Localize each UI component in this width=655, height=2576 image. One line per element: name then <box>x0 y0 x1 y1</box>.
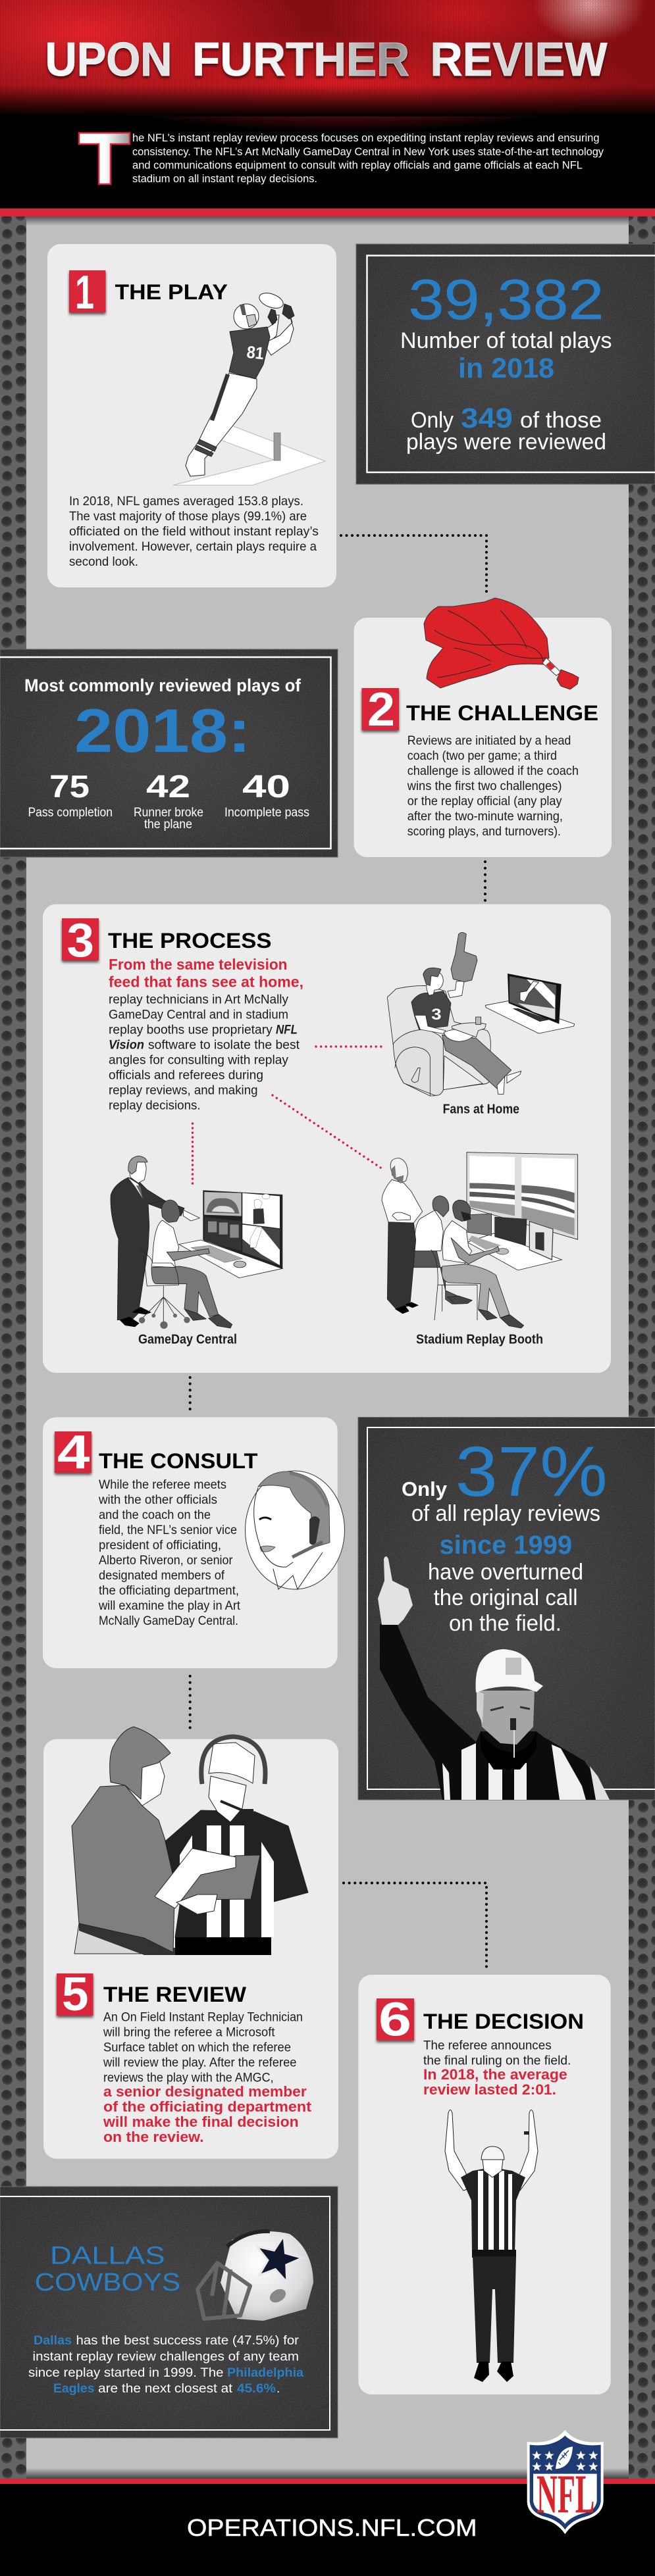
panel: step 6 the decision <box>358 1975 611 2394</box>
text: only 349 reviewed <box>406 403 606 455</box>
bottom red bar <box>0 2479 655 2484</box>
dotted connector: step 2 to step 3 <box>484 862 486 903</box>
step 3 body text: angles for consulting with replay <box>109 1054 288 1067</box>
heading: Most commonly reviewed plays of <box>24 676 301 695</box>
step 6 red text: In 2018, the average <box>423 2066 567 2083</box>
panel: step 1 the play <box>47 244 336 587</box>
heading: the process: THE PROCESS <box>108 929 271 953</box>
step 5 red text: a senior designated member <box>103 2083 307 2100</box>
label: gameday central: GameDay Central <box>138 1333 237 1347</box>
step 2 body text: scoring plays, and turnovers). <box>407 824 561 839</box>
step 5 body text: An On Field Instant Replay Technician <box>103 2010 303 2025</box>
intro drop cap T <box>79 133 130 184</box>
step 2 body text <box>407 733 579 839</box>
illustration: technician and referee with tablet <box>72 1727 655 1955</box>
overturned text: have overturned <box>428 1560 583 1585</box>
footer url: OPERATIONS.NFL.COM <box>187 2514 477 2541</box>
step 6 body text: The referee announces <box>423 2039 552 2052</box>
title: REVIEW <box>431 34 608 86</box>
stat: 42 runner broke the plane: 42 <box>146 770 190 805</box>
step 6 body text: the final ruling on the field. <box>423 2054 571 2068</box>
text: only 349 reviewed: plays were reviewed <box>406 430 606 455</box>
panel: step 2 the challenge <box>354 598 612 857</box>
step 3 body text: NFL <box>276 1024 298 1037</box>
step 2 body text: challenge is allowed if the coach <box>407 764 579 778</box>
step 5 body text <box>103 2010 303 2085</box>
stat: 40 incomplete pass: 40 <box>242 770 290 805</box>
overturned text <box>411 1501 600 1636</box>
illustration: fan in recliner: 3 <box>431 1006 442 1024</box>
step 1 body text: officiated on the field without instant replay’s <box>69 524 319 539</box>
red lead text <box>109 956 303 991</box>
step 5 red text <box>103 2083 312 2145</box>
dallas paragraph: since replay started in 1999. The <box>28 2366 224 2380</box>
number badge 6: 6 <box>379 1993 411 2046</box>
intro paragraph: consistency. The NFL’s Art McNally GameDay Central in New York uses state-of-the-art technology <box>132 145 604 158</box>
step 5 red text: of the officiating department <box>103 2098 312 2115</box>
title: UPON <box>45 34 172 86</box>
dallas paragraph: instant replay review challenges of any team <box>33 2350 299 2364</box>
panel: step 5 the review <box>43 1727 655 2159</box>
step 5 body text: Surface tablet on which the referee <box>103 2041 291 2055</box>
title <box>45 34 608 86</box>
step 3 body text: officials and referees during <box>109 1068 263 1083</box>
red lead text: From the same television <box>109 956 287 973</box>
step 1 body text: The vast majority of those plays (99.1%) are <box>69 509 307 524</box>
intro paragraph: he NFL’s instant replay review process focuses on expediting instant replay reviews and ensuring <box>132 132 599 144</box>
step 4 body text: the officiating department, <box>99 1583 239 1598</box>
heading: the consult: THE CONSULT <box>99 1449 258 1473</box>
step 2 body text: after the two-minute warning, <box>407 809 563 824</box>
step 6 red text <box>423 2066 567 2098</box>
illustration: receiver catching ball: 81 <box>246 342 265 363</box>
step 5 red text: on the review. <box>103 2129 204 2145</box>
text: number of total plays in 2018: Number of total plays <box>400 328 612 353</box>
dallas paragraph: Eagles <box>53 2382 95 2396</box>
step 5 body text: will review the play. After the referee <box>103 2056 297 2069</box>
icon: nfl shield logo <box>527 2430 604 2534</box>
header band <box>0 0 655 132</box>
text: only: Only <box>402 1477 448 1500</box>
red lead text: feed that fans see at home, <box>109 974 303 991</box>
stat: 42 runner broke the plane <box>134 770 203 831</box>
stat: 75 pass completion: Pass completion <box>28 806 113 820</box>
intro paragraph: stadium on all instant replay decisions. <box>132 172 317 185</box>
step 2 body text: Reviews are initiated by a head <box>407 733 571 748</box>
step 1 body text: In 2018, NFL games averaged 153.8 plays. <box>69 494 303 508</box>
stat: 75 pass completion: 75 <box>49 770 90 805</box>
panel: step 3 the process <box>43 904 611 1373</box>
step 3 body text: Vision <box>109 1038 144 1053</box>
text: only 349 reviewed: 349 <box>461 403 513 434</box>
stat box: total plays <box>356 244 655 484</box>
step 5 body text: will bring the referee a Microsoft <box>103 2026 275 2039</box>
step 4 body text: president of officiating, <box>99 1538 221 1552</box>
text: number of total plays in 2018: in 2018 <box>458 353 554 384</box>
heading: the play: THE PLAY <box>115 280 228 304</box>
step 3 body text: replay technicians in Art McNally <box>109 993 288 1006</box>
red dotted lines to illustrations <box>192 1047 383 1184</box>
stat: 42 runner broke the plane: Runner broke <box>134 806 203 820</box>
big year: 2018: <box>74 696 251 765</box>
number badge 3: 3 <box>67 914 94 967</box>
stat: 75 pass completion <box>28 770 113 820</box>
icon: red challenge flag <box>424 598 579 689</box>
dallas paragraph: 45.6% <box>237 2382 276 2396</box>
photo: referee pointing up <box>378 1556 610 1800</box>
step 3 body text <box>109 993 300 1113</box>
illustration: stadium replay booth <box>382 1152 578 1328</box>
step 4 body text: McNally GameDay Central. <box>99 1614 238 1628</box>
step 2 body text: coach (two per game; a third <box>407 749 557 763</box>
step 3 body text: replay reviews, and making <box>109 1084 258 1097</box>
dallas paragraph: has the best success rate (47.5%) for <box>76 2334 300 2348</box>
heading: the challenge: THE CHALLENGE <box>406 701 598 725</box>
step 2 body text: wins the first two challenges) <box>407 779 562 793</box>
step 5 body text: reviews the play with the AMGC, <box>103 2071 274 2085</box>
team name: DALLAS <box>50 2242 165 2269</box>
overturned text: of all replay reviews <box>411 1501 600 1526</box>
label: stadium replay booth: Stadium Replay Booth <box>416 1333 543 1347</box>
overturned text: since 1999 <box>440 1531 572 1560</box>
step 1 body text <box>69 494 319 569</box>
step 1 body text: second look. <box>69 555 138 569</box>
icon: cowboys helmet <box>197 2231 313 2321</box>
step 3 body text: GameDay Central and in stadium <box>109 1008 288 1022</box>
step 6 red text: review lasted 2:01. <box>423 2081 556 2098</box>
stat box: most commonly reviewed plays <box>0 649 338 857</box>
panel: step 4 the consult <box>43 1417 345 1668</box>
step 4 body text: While the referee meets <box>99 1477 226 1492</box>
text: number of total plays in 2018 <box>400 328 612 384</box>
step 4 body text: field, the NFL’s senior vice <box>99 1523 237 1537</box>
callout: dallas cowboys <box>0 2187 338 2438</box>
title: FURTHER <box>192 34 409 86</box>
team name: COWBOYS <box>35 2269 180 2296</box>
dotted connector: step 3 to step 4 <box>189 1377 192 1414</box>
step 1 body text: involvement. However, certain plays require a <box>69 539 317 554</box>
number badge 5: 5 <box>62 1968 88 2021</box>
number 39,382: 39,382 <box>408 268 604 332</box>
team name <box>35 2242 180 2296</box>
illustration: senior vp with headset <box>245 1471 345 1589</box>
dallas paragraph: Philadelphia <box>227 2366 303 2380</box>
illustration: gameday central <box>111 1156 282 1329</box>
step 4 body text: and the coach on the <box>99 1508 211 1522</box>
number badge 1: 1 <box>75 266 94 319</box>
top red bar <box>0 209 655 216</box>
dallas paragraph: . <box>276 2382 280 2396</box>
illustration: receiver catching ball <box>173 290 325 485</box>
illustration: fan in recliner <box>387 932 575 1096</box>
dallas paragraph <box>28 2334 303 2396</box>
number badge 4: 4 <box>57 1426 90 1479</box>
overturned text: on the field. <box>449 1611 562 1636</box>
step 4 body text <box>98 1477 241 1628</box>
step 4 body text: will examine the play in Art <box>98 1598 241 1613</box>
dallas paragraph: are the next closest at <box>98 2382 233 2396</box>
step 3 body text: software to isolate the best <box>148 1038 300 1053</box>
stat: 40 incomplete pass <box>224 770 309 820</box>
label: fans at home: Fans at Home <box>443 1102 519 1117</box>
intro paragraph <box>132 132 604 185</box>
heading: the decision: THE DECISION <box>423 2010 584 2033</box>
illustration: referee signaling touchdown <box>445 2110 538 2382</box>
step 5 red text: will make the final decision <box>103 2114 299 2130</box>
stat: 40 incomplete pass: Incomplete pass <box>224 806 309 820</box>
number badge 2: 2 <box>367 683 395 736</box>
text: only 349 reviewed: of those <box>520 408 602 433</box>
text: only 349 reviewed: Only <box>411 408 454 433</box>
step 4 body text: designated members of <box>99 1568 225 1583</box>
dotted connector: step 1 to step 2 <box>341 535 486 596</box>
number 37 percent: 37% <box>456 1431 608 1511</box>
step 6 body text <box>423 2039 571 2068</box>
stat: 42 runner broke the plane: the plane <box>144 818 192 831</box>
dotted connector: step 5 to step 6 <box>344 1883 486 1971</box>
dotted connector: step 4 to step 5 <box>189 1676 192 1734</box>
dallas paragraph: Dallas <box>34 2334 72 2348</box>
heading: the review: THE REVIEW <box>103 1983 247 2006</box>
intro paragraph: and communications equipment to consult with replay officials and game officials at each NFL <box>132 159 583 171</box>
step 4 body text: with the other officials <box>98 1493 217 1507</box>
step 3 body text: replay decisions. <box>109 1099 201 1113</box>
step 2 body text: or the replay official (any play <box>407 794 562 808</box>
step 4 body text: Alberto Riveron, or senior <box>99 1553 233 1568</box>
icon: nfl shield logo: NFL <box>537 2464 594 2525</box>
overturned text: the original call <box>434 1585 578 1610</box>
step 3 body text: replay booths use proprietary <box>109 1024 273 1037</box>
stat box: 37 percent overturned <box>358 1417 655 1800</box>
